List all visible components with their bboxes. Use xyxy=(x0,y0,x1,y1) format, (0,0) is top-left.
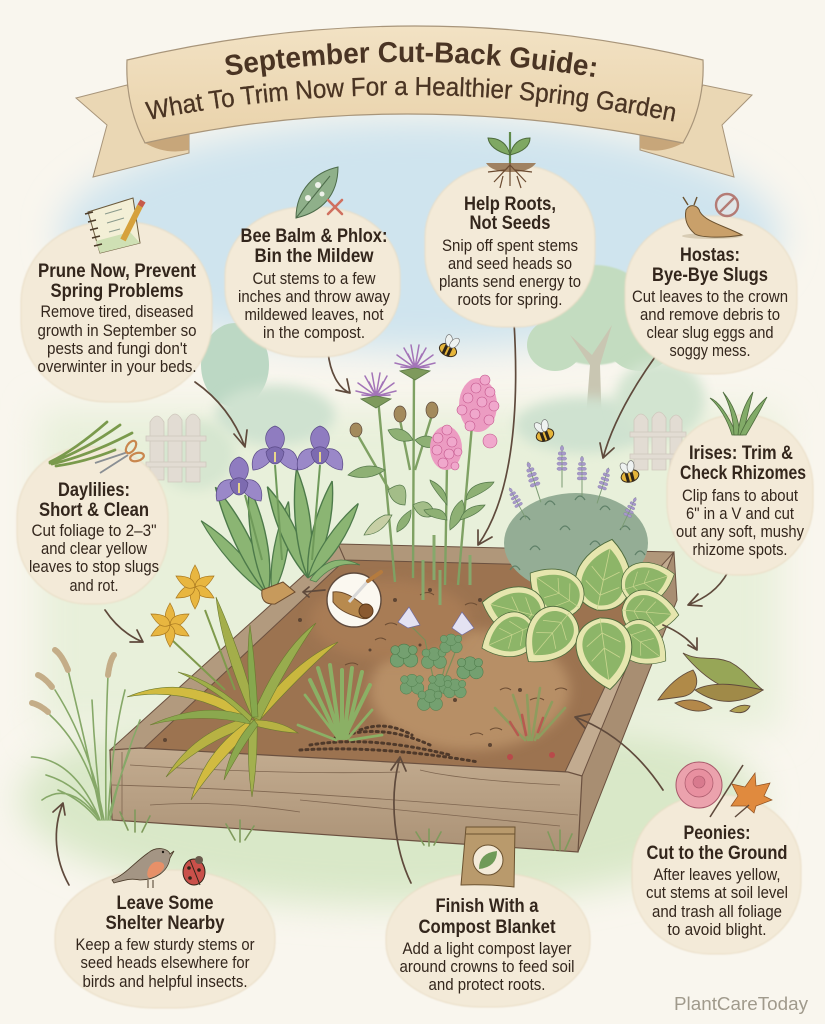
heading: bee balm xyxy=(240,226,388,267)
body: hostas: Cut leaves to the crown xyxy=(632,288,788,306)
body: hostas: and remove debris to xyxy=(640,306,780,324)
heading: hostas: Bye-Bye Slugs xyxy=(652,265,768,286)
plant: hosta xyxy=(473,534,681,693)
grass and tufts xyxy=(32,650,572,850)
body: bee balm xyxy=(238,270,391,342)
heading: prune now: Prune Now, Prevent xyxy=(38,261,197,282)
icon: peony and maple leaf xyxy=(676,762,772,817)
heading: peonies: Peonies: xyxy=(684,823,750,844)
body: prune now: growth in September so xyxy=(38,322,196,340)
heading: daylilies xyxy=(39,480,149,521)
heading: compost: Finish With a xyxy=(436,896,539,917)
body: prune now: overwinter in your beds. xyxy=(38,358,196,376)
body: prune now xyxy=(38,303,196,376)
plant: irises xyxy=(197,426,364,604)
body: hostas xyxy=(632,288,788,360)
body: help roots: roots for spring. xyxy=(458,291,562,309)
heading: bee balm: Bee Balm & Phlox: xyxy=(240,226,388,247)
body: hostas: soggy mess. xyxy=(670,342,750,360)
body: compost: Add a light compost layer xyxy=(402,940,572,958)
body: daylilies xyxy=(29,522,159,595)
heading: compost: Compost Blanket xyxy=(418,917,556,938)
icon: compost bag xyxy=(461,827,515,887)
banner fold shadows xyxy=(145,132,683,151)
panel: daylilies xyxy=(17,422,168,604)
panel: leave shelter xyxy=(55,849,275,1008)
banner right tail xyxy=(640,85,752,177)
panel: compost blanket xyxy=(386,827,590,1007)
plant: cut-back chives xyxy=(298,665,382,740)
body: bee balm: inches and throw away xyxy=(238,288,391,306)
inset: rhizome close-up xyxy=(303,572,381,627)
panel: irises xyxy=(667,392,813,575)
bees xyxy=(437,332,640,484)
heading: leave shelter xyxy=(106,893,225,934)
body: peonies: After leaves yellow, xyxy=(654,866,780,884)
body: help roots: plants send energy to xyxy=(439,273,581,291)
fallen leaves pile xyxy=(658,653,763,713)
heading: daylilies: Daylilies: xyxy=(58,480,130,501)
icon: mildew leaf with red x xyxy=(296,167,342,218)
heading: irises xyxy=(680,443,806,484)
body: irises: 6" in a V and cut xyxy=(686,505,794,523)
panel: bee balm and phlox xyxy=(225,167,400,357)
title text: September Cut-Back Guide: xyxy=(226,42,596,77)
watermark: PlantCareToday xyxy=(674,994,808,1014)
title text xyxy=(144,42,676,122)
heading: compost xyxy=(418,896,556,938)
banner ribbon xyxy=(127,26,703,143)
arrows xyxy=(53,322,728,885)
body: peonies: and trash all foliage xyxy=(652,903,782,921)
heading: peonies: Cut to the Ground xyxy=(646,843,788,864)
plant: cut peony stems xyxy=(495,688,565,740)
body: leave shelter: seed heads elsewhere for xyxy=(80,954,250,972)
body: peonies: to avoid blight. xyxy=(668,921,766,939)
panel: prune now xyxy=(21,198,212,402)
background watercolor scene xyxy=(20,120,780,905)
heading: leave shelter: Leave Some xyxy=(116,893,214,914)
heading: help roots: Not Seeds xyxy=(470,213,550,234)
body: irises: rhizome spots. xyxy=(692,541,788,559)
heading: hostas xyxy=(652,245,768,286)
plant: lavender shrub xyxy=(504,445,648,593)
icon: trimmed iris fan xyxy=(710,392,767,435)
body: peonies xyxy=(646,866,788,939)
plant: phlox xyxy=(424,375,499,585)
body: leave shelter: birds and helpful insects. xyxy=(82,973,248,991)
body: bee balm: in the compost. xyxy=(263,324,365,342)
body: compost: around crowns to feed soil xyxy=(400,958,574,976)
panel: peonies xyxy=(632,762,801,954)
panel: help roots xyxy=(425,132,595,327)
heading: prune now: Spring Problems xyxy=(50,281,184,302)
heading: daylilies: Short & Clean xyxy=(39,500,149,521)
body: irises xyxy=(676,487,805,559)
icon: notepad and pencil xyxy=(85,198,143,253)
body: peonies: cut stems at soil level xyxy=(646,884,788,902)
body: daylilies: and rot. xyxy=(70,577,118,595)
body: daylilies: Cut foliage to 2–3" xyxy=(32,522,157,540)
heading: peonies xyxy=(646,823,788,864)
raised garden bed xyxy=(110,544,677,852)
title text: What To Trim Now For a Healthier Spring Garden xyxy=(144,77,676,122)
plant: columbine xyxy=(390,607,483,710)
icon: sprout and roots xyxy=(486,132,536,188)
body: daylilies: leaves to stop slugs xyxy=(29,558,159,576)
icon: grass blades and scissors xyxy=(50,422,145,473)
body: leave shelter: Keep a few sturdy stems or xyxy=(76,936,255,954)
body: irises: Clip fans to about xyxy=(682,487,798,505)
plant: bee balm xyxy=(348,345,470,605)
heading: bee balm: Bin the Mildew xyxy=(254,246,374,267)
body: bee balm: mildewed leaves, not xyxy=(244,306,384,324)
body: compost: and protect roots. xyxy=(428,976,546,994)
body: help roots xyxy=(439,237,581,309)
icon: ladybug xyxy=(183,856,205,885)
heading: help roots: Help Roots, xyxy=(464,194,556,215)
heading: hostas: Hostas: xyxy=(680,245,740,266)
body: compost xyxy=(400,940,574,994)
title banner xyxy=(75,25,753,178)
body: irises: out any soft, mushy xyxy=(676,523,805,541)
body: hostas: clear slug eggs and xyxy=(646,324,774,342)
body: leave shelter xyxy=(76,936,255,991)
icon: slug with no sign xyxy=(682,194,742,239)
heading: irises: Irises: Trim & xyxy=(689,443,793,464)
banner left tail xyxy=(76,85,189,177)
body: prune now: pests and fungi don't xyxy=(47,340,187,358)
heading: prune now xyxy=(38,261,197,302)
plant: daylily xyxy=(127,565,338,800)
body: bee balm: Cut stems to a few xyxy=(252,270,376,288)
panel: hostas xyxy=(625,194,797,374)
heading: leave shelter: Shelter Nearby xyxy=(106,913,225,934)
body: daylilies: and clear yellow xyxy=(41,540,147,558)
body: prune now: Remove tired, diseased xyxy=(40,303,194,321)
body: help roots: Snip off spent stems xyxy=(442,237,578,255)
heading: help roots xyxy=(464,194,556,234)
body: help roots: and seed heads so xyxy=(448,255,572,273)
icon: robin xyxy=(112,849,174,888)
